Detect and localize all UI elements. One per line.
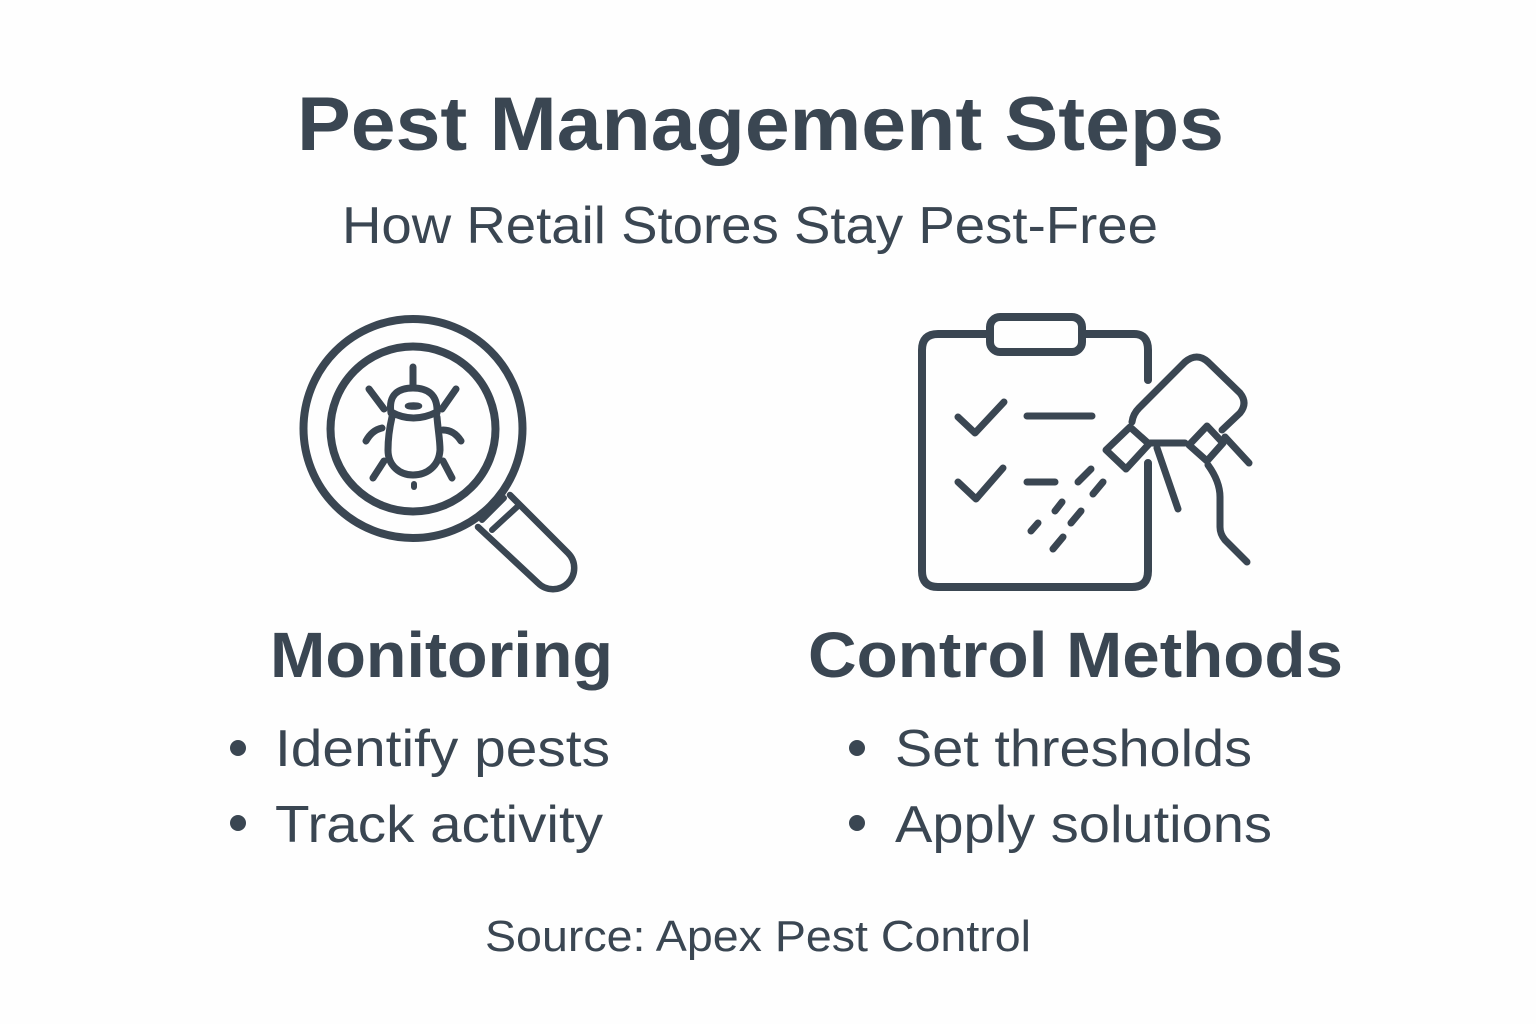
heading: monitoring: Monitoring bbox=[270, 619, 613, 691]
list: control methods bbox=[849, 720, 1272, 854]
list: monitoring bbox=[230, 720, 610, 854]
list: monitoring: Track activity bbox=[275, 796, 603, 854]
icon: clipboard with checklist and spray bottle bbox=[922, 317, 1249, 587]
list: control methods: Set thresholds bbox=[895, 720, 1252, 778]
list: control methods: Apply solutions bbox=[895, 796, 1272, 854]
title: Pest Management Steps bbox=[297, 82, 1224, 167]
source: Source: Apex Pest Control bbox=[485, 912, 1031, 961]
heading: control methods: Control Methods bbox=[808, 619, 1343, 691]
icon: magnifying glass with bug bbox=[304, 319, 574, 589]
subtitle: How Retail Stores Stay Pest-Free bbox=[342, 197, 1158, 255]
list: monitoring: Identify pests bbox=[275, 720, 610, 778]
